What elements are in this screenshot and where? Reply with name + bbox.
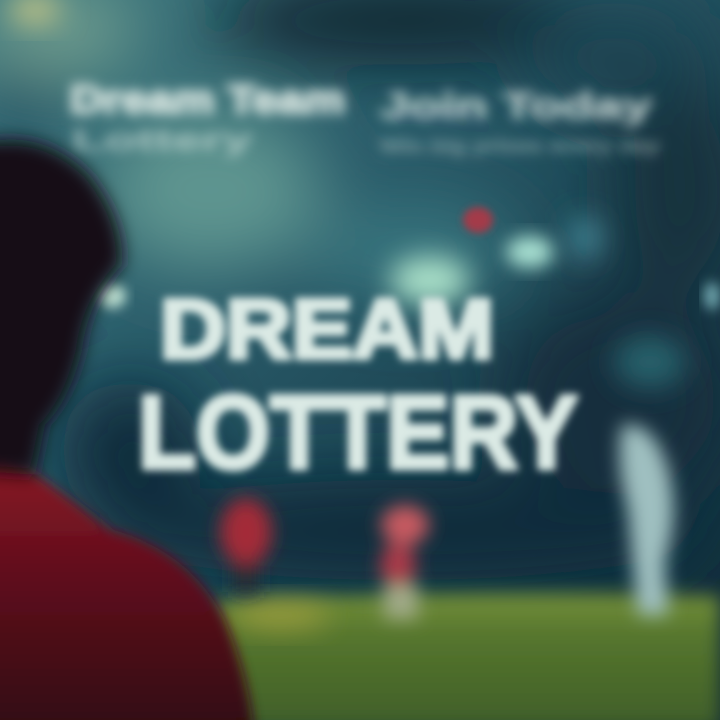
headline left line one: Dream Team	[70, 78, 345, 122]
top headline text, blurred	[70, 78, 660, 157]
title: DREAM LOTTERY	[138, 282, 578, 491]
glow spots	[98, 216, 720, 388]
white standing figure, right	[620, 424, 674, 615]
headline right line one: Join Today	[380, 85, 652, 126]
red ball	[463, 207, 493, 233]
title word: LOTTERY: LOTTERY	[138, 375, 578, 491]
headline left line two: Lottery	[72, 124, 253, 157]
grass field	[215, 593, 720, 720]
person head	[0, 139, 122, 475]
headline right line two: Win big prizes every day	[380, 136, 660, 156]
player in red and white, centre	[380, 505, 429, 619]
person red shirt	[0, 450, 255, 720]
title word: DREAM: DREAM	[160, 282, 494, 376]
foreground person	[0, 139, 255, 720]
player in red, left	[220, 498, 272, 592]
